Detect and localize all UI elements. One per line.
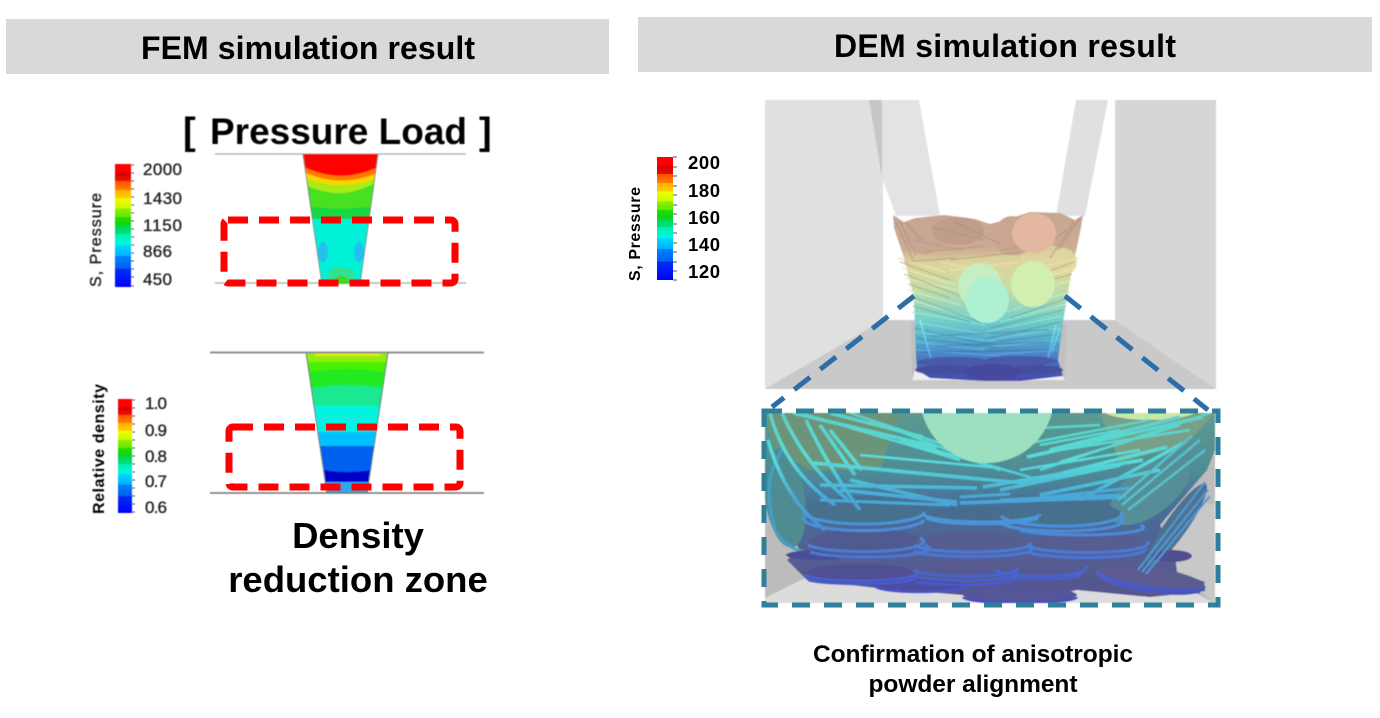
arrow: left zoom guide (772, 296, 914, 407)
legend: pressure colour scale: 866 (143, 242, 172, 261)
chart: pressure load contour (215, 154, 466, 288)
legend: relative density colour scale (91, 384, 167, 517)
heading bar: FEM: FEM simulation result (141, 30, 475, 66)
text: confirmation of anisotropic powder alignment: powder alignment (868, 671, 1078, 698)
large peach particle (1012, 213, 1056, 253)
legend: relative density colour scale: 0.9 (145, 421, 167, 440)
legend: DEM pressure colour scale: 160 (688, 207, 720, 228)
heading bar: DEM: DEM simulation result (834, 28, 1176, 64)
heading bar: DEM (638, 17, 1372, 72)
text: density reduction zone (228, 515, 488, 600)
legend: pressure colour scale: 1150 (143, 216, 182, 235)
panel: DEM simulation result (627, 17, 1372, 698)
legend: DEM pressure colour scale: 180 (688, 180, 720, 201)
arrow: right zoom guide (1065, 296, 1208, 410)
figure: DEM die cavity with particles (765, 100, 1216, 389)
legend: pressure colour scale: 1430 (143, 189, 182, 208)
particle bed (893, 212, 1083, 381)
text: density reduction zone: Density (292, 515, 425, 556)
callout: pressure density reduction box (224, 220, 455, 283)
legend: DEM pressure colour scale (627, 152, 720, 282)
heading: Pressure Load: Pressure Load (210, 111, 467, 152)
panel: FEM simulation result (6, 19, 609, 600)
stacked flat disks (786, 496, 1207, 603)
text: confirmation of anisotropic powder alignment: Confirmation of anisotropic (813, 641, 1133, 668)
chart: relative density contour (210, 352, 484, 494)
text: confirmation of anisotropic powder alignment (813, 641, 1133, 698)
legend: DEM pressure colour scale: 120 (688, 261, 720, 282)
text: density reduction zone: reduction zone (228, 559, 488, 600)
legend: DEM pressure colour scale: 200 (688, 152, 720, 173)
legend: relative density colour scale: 1.0 (145, 394, 167, 413)
legend: DEM pressure colour scale: S, Pressure (627, 187, 644, 281)
legend: relative density colour scale: 0.7 (145, 472, 167, 491)
legend: pressure colour scale (88, 160, 182, 289)
heading bar: FEM (6, 19, 609, 74)
legend: relative density colour scale: 0.6 (145, 498, 167, 517)
legend: relative density colour scale: 0.8 (145, 447, 167, 466)
legend: pressure colour scale: S, Pressure (88, 193, 105, 287)
legend: DEM pressure colour scale: 140 (688, 234, 720, 255)
legend: pressure colour scale: 2000 (143, 160, 182, 179)
large green particle section (922, 412, 1052, 464)
callout: density reduction box (229, 427, 460, 487)
legend: pressure colour scale: 450 (143, 270, 172, 289)
heading: Pressure Load: [ (183, 111, 196, 153)
inset dashed frame (764, 411, 1218, 605)
large pale green particles (958, 261, 1055, 323)
legend: relative density colour scale: Relative density (91, 384, 108, 514)
heading: Pressure Load: ] (479, 111, 492, 153)
figure: magnified inset of aligned particles (762, 408, 1220, 608)
